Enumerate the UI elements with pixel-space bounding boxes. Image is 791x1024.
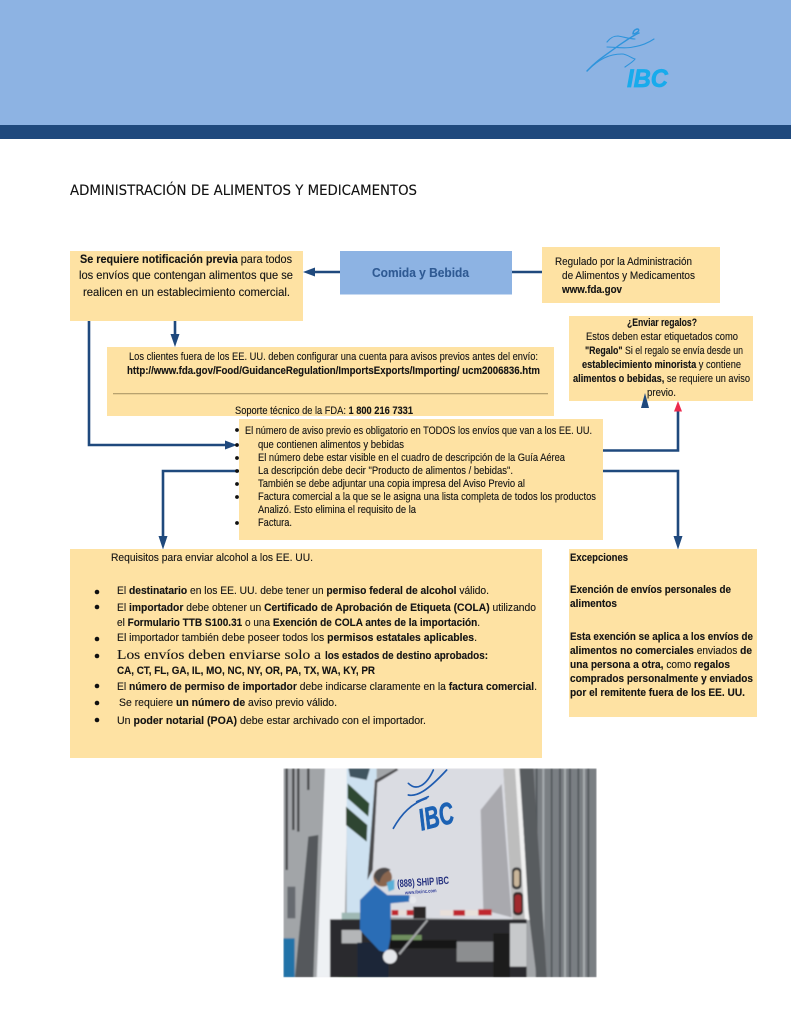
text: prior notice rules: Factura.: [258, 517, 292, 529]
photo text: truck phone: (888) SHIP IBC: [397, 875, 450, 890]
photo text: IBC truck logo: IBC: [415, 796, 458, 837]
text: exceptions: Excepciones: [570, 552, 628, 564]
text: prior notice: [79, 252, 293, 299]
text: prior notice rules: El número de aviso previo es obligatorio en TODOS los envíos que van a los EE. UU.: [245, 425, 592, 437]
text: gifts: previo.: [647, 387, 676, 399]
arrow: small triangle under gifts: [641, 393, 649, 408]
arrow: bullets to exceptions: [603, 471, 682, 550]
text: gifts: "Regalo" Si el regalo se envía desde un: [585, 345, 743, 357]
title: ADMINISTRACIÓN DE ALIMENTOS Y MEDICAMENTOS: [70, 181, 417, 199]
panel: prior notice required: [70, 251, 303, 321]
text: alcohol list: los estados de destino aprobados:: [325, 650, 488, 662]
icon: IBC runner logo: IBC: [627, 65, 669, 93]
text: exceptions: alimentos: [570, 598, 617, 610]
text: prior notice: los envíos que contengan alimentos que se: [79, 268, 293, 282]
text: alcohol list: CA, CT, FL, GA, IL, MO, NC, NY, OR, PA, TX, WA, KY, PR: [117, 665, 375, 677]
text: FDA technical support: Soporte técnico de la FDA: 1 800 216 7331: [235, 405, 413, 417]
photo text: truck website: www.ibcinc.com: [404, 888, 437, 896]
text: account setup: Los clientes fuera de los EE. UU. deben configurar una cuenta para avisos previos antes del envío:: [129, 351, 538, 363]
arrow: regulated to food and drink: [512, 271, 542, 273]
text: alcohol list: Un poder notarial (POA) debe estar archivado con el importador.: [117, 715, 426, 727]
text: alcohol list: Se requiere un número de aviso previo válido.: [119, 697, 337, 709]
text: prior notice rules: Analizó. Esto elimina el requisito de la: [258, 504, 417, 516]
icon: IBC runner logo: [587, 29, 669, 93]
text: exceptions: [570, 552, 753, 699]
arrow: prior notice to account: [170, 321, 180, 347]
text: prior notice rules: [245, 425, 596, 529]
bullets: [235, 428, 239, 525]
text: regulated by: de Alimentos y Medicamentos: [562, 270, 695, 282]
text: regulated by: Regulado por la Administración: [555, 256, 692, 268]
text: gifts: establecimiento minorista y contiene: [582, 359, 741, 371]
arrow: bullets to alcohol: [158, 471, 239, 550]
panel: sending gifts: [569, 316, 753, 401]
text: exceptions: una persona a otra, como regalos: [570, 659, 730, 671]
text: alcohol list: el Formulario TTB S100.31 o una Exención de COLA antes de la importación.: [117, 617, 480, 629]
text: alcohol list: El importador debe obtener un Certificado de Aprobación de Etiqueta (COLA) utilizando: [117, 602, 536, 614]
arrow: bullets to gifts: [603, 401, 682, 450]
text: regulated by: www.fda.gov: [561, 284, 623, 296]
text: exceptions: por el remitente fuera de los EE. UU.: [570, 687, 745, 699]
header banner: [0, 0, 791, 139]
arrow: prior notice to bullets: [89, 321, 237, 450]
panel: alcohol requirements: [70, 549, 542, 758]
text: account setup: http://www.fda.gov/Food/GuidanceRegulation/ImportsExports/Importing/ ucm2006836.htm: [127, 365, 540, 377]
text: exceptions: Esta exención se aplica a los envíos de: [570, 631, 753, 643]
text: gifts: Estos deben estar etiquetados como: [586, 331, 738, 343]
text: alcohol list: Los envíos deben enviarse solo a: [117, 648, 322, 663]
text: gifts: alimentos o bebidas, se requiere un aviso: [573, 373, 750, 385]
text: alcohol list: El número de permiso de importador debe indicarse claramente en la factura comercial.: [117, 681, 537, 693]
text: prior notice rules: También se debe adjuntar una copia impresa del Aviso Previo al: [258, 478, 525, 490]
heading: Comida y Bebida: Comida y Bebida: [372, 265, 470, 280]
text: alcohol list: El importador también debe poseer todos los permisos estatales aplicables.: [117, 632, 477, 644]
photo: worker at IBC truck: [283, 768, 597, 977]
bullets: [95, 590, 99, 722]
text: alcohol list: [117, 585, 537, 727]
text: exceptions: comprados personalmente y enviados: [570, 673, 753, 685]
text: regulated by: [555, 256, 695, 296]
text: exceptions: Exención de envíos personales de: [570, 584, 731, 596]
text: prior notice: Se requiere notificación previa para todos: [80, 252, 292, 266]
panel: food and drink: [340, 251, 512, 294]
panel: prior notice rules: [235, 419, 603, 540]
text: account setup: [127, 351, 540, 377]
panel: exceptions: [569, 549, 757, 717]
text: prior notice rules: Factura comercial a la que se le asigna una lista completa de todos los productos: [258, 491, 596, 503]
text: gifts: [573, 317, 750, 399]
text: prior notice rules: que contienen alimentos y bebidas: [258, 439, 404, 451]
panel: FDA regulation: [542, 247, 720, 303]
photo text: IBC truck logo: [392, 769, 454, 831]
heading: alcohol: Requisitos para enviar alcohol a los EE. UU.: [111, 552, 313, 564]
text: alcohol list: El destinatario en los EE. UU. debe tener un permiso federal de alcohol válido.: [117, 585, 489, 597]
text: prior notice rules: La descripción debe decir "Producto de alimentos / bebidas".: [258, 465, 513, 477]
panel: prior notice account: [107, 347, 554, 417]
text: exceptions: alimentos no comerciales enviados de: [570, 645, 752, 657]
text: prior notice: realicen en un establecimiento comercial.: [83, 285, 290, 299]
text: gifts: ¿Enviar regalos?: [627, 317, 697, 329]
text: prior notice rules: El número debe estar visible en el cuadro de descripción de la Guía Aérea: [258, 452, 566, 464]
arrow: food and drink to prior notice: [303, 268, 340, 276]
